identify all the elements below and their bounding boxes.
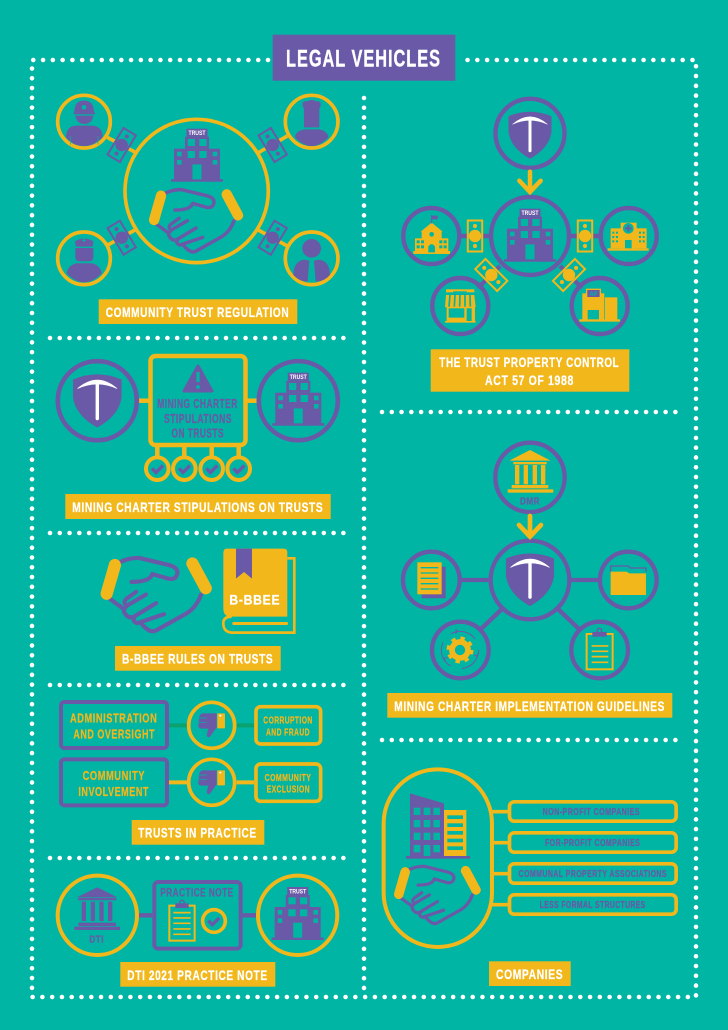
icon: money lower left — [475, 259, 507, 291]
arrow — [519, 172, 541, 192]
label: ACT 57 OF 1988 — [485, 372, 574, 388]
flow diagram: EXCLUSION — [267, 785, 310, 796]
shield circle — [58, 361, 137, 440]
label — [387, 693, 672, 718]
flow diagram — [61, 702, 321, 805]
flow diagram: INVOLVEMENT — [78, 785, 149, 799]
label: MINING CHARTER STIPULATIONS ON TRUSTS — [72, 499, 323, 515]
flow diagram: ADMINISTRATION — [70, 712, 157, 726]
icon: handshake — [107, 558, 206, 631]
pill, building and list: NON-PROFIT COMPANIES — [543, 807, 640, 818]
icon: money lower right — [553, 259, 585, 291]
pill, building and list: FOR-PROFIT COMPANIES — [545, 838, 640, 849]
connectors — [138, 401, 258, 458]
panel: dti practice note — [58, 876, 337, 987]
circles and icons — [403, 443, 657, 678]
icon: money bottom left — [108, 221, 136, 255]
stipulations box: MINING CHARTER — [157, 397, 238, 411]
label — [120, 962, 275, 987]
people, connectors and payments — [58, 95, 338, 285]
icon: handshake — [399, 866, 476, 924]
panel: trusts in practice — [61, 702, 321, 845]
panel: mining charter implementation guidelines — [387, 443, 672, 718]
panel: companies — [384, 769, 676, 986]
pill, building and list: LESS FORMAL STRUCTURES — [540, 900, 646, 911]
icon: trust building — [504, 209, 556, 262]
title: LEGAL VEHICLES — [286, 46, 441, 72]
icon: money top right — [259, 128, 287, 162]
label — [115, 646, 281, 671]
trust circle: TRUST — [290, 374, 307, 381]
flow diagram: COMMUNITY — [265, 773, 311, 784]
icon: trust building: TRUST — [522, 210, 539, 217]
flow diagram: AND FRAUD — [266, 727, 310, 738]
check circles — [146, 457, 250, 480]
stipulations box: ON TRUSTS — [172, 426, 224, 440]
label — [65, 494, 331, 519]
label: COMPANIES — [496, 966, 563, 982]
flow diagram: CORRUPTION — [263, 716, 313, 727]
icon: money top left — [108, 128, 136, 162]
dti, note and connectors — [58, 876, 337, 955]
trust circle — [259, 361, 338, 440]
icon: book — [223, 549, 294, 633]
panel: b-bbee rules — [107, 549, 294, 671]
title — [273, 35, 455, 81]
pill, building and list — [384, 769, 676, 947]
icon: trust building: TRUST — [289, 888, 306, 895]
label — [132, 820, 264, 845]
panel: mining charter stipulations — [58, 356, 338, 519]
label: B-BBEE RULES ON TRUSTS — [122, 650, 273, 666]
dti, note and connectors: PRACTICE NOTE — [160, 886, 234, 900]
pill, building and list: COMMUNAL PROPERTY ASSOCIATIONS — [519, 869, 667, 880]
dti, note and connectors: DTI — [89, 934, 104, 945]
icon: handshake — [154, 190, 238, 252]
label — [489, 961, 571, 986]
icon: shield — [506, 553, 554, 606]
panel: trust property control act — [403, 99, 657, 392]
icon: money left — [468, 220, 482, 252]
flow diagram: AND OVERSIGHT — [73, 728, 155, 742]
flow diagram: COMMUNITY — [83, 769, 145, 783]
icon: money bottom right — [259, 221, 287, 255]
circles and icons: DMR — [520, 497, 540, 508]
circles and connectors — [403, 99, 657, 334]
label: COMMUNITY TRUST REGULATION — [106, 304, 289, 320]
icon: shield — [508, 112, 552, 159]
icon: trust building: TRUST — [188, 130, 206, 137]
panel: community trust regulation — [58, 95, 338, 324]
label: THE TRUST PROPERTY CONTROL — [439, 354, 619, 370]
label — [431, 349, 629, 392]
icon: money right — [578, 220, 592, 252]
icon: book: B-BBEE — [229, 591, 280, 607]
icon: trust building — [272, 887, 324, 940]
icons: school, hospital, shop, factory: AF — [589, 291, 598, 298]
icon: trust building — [171, 129, 223, 182]
label: DTI 2021 PRACTICE NOTE — [127, 967, 268, 983]
stipulations box: STIPULATIONS — [164, 412, 232, 426]
label: TRUSTS IN PRACTICE — [138, 825, 257, 841]
label — [99, 299, 297, 324]
stipulations box — [150, 356, 246, 445]
icons: school, hospital, shop, factory — [413, 215, 649, 323]
